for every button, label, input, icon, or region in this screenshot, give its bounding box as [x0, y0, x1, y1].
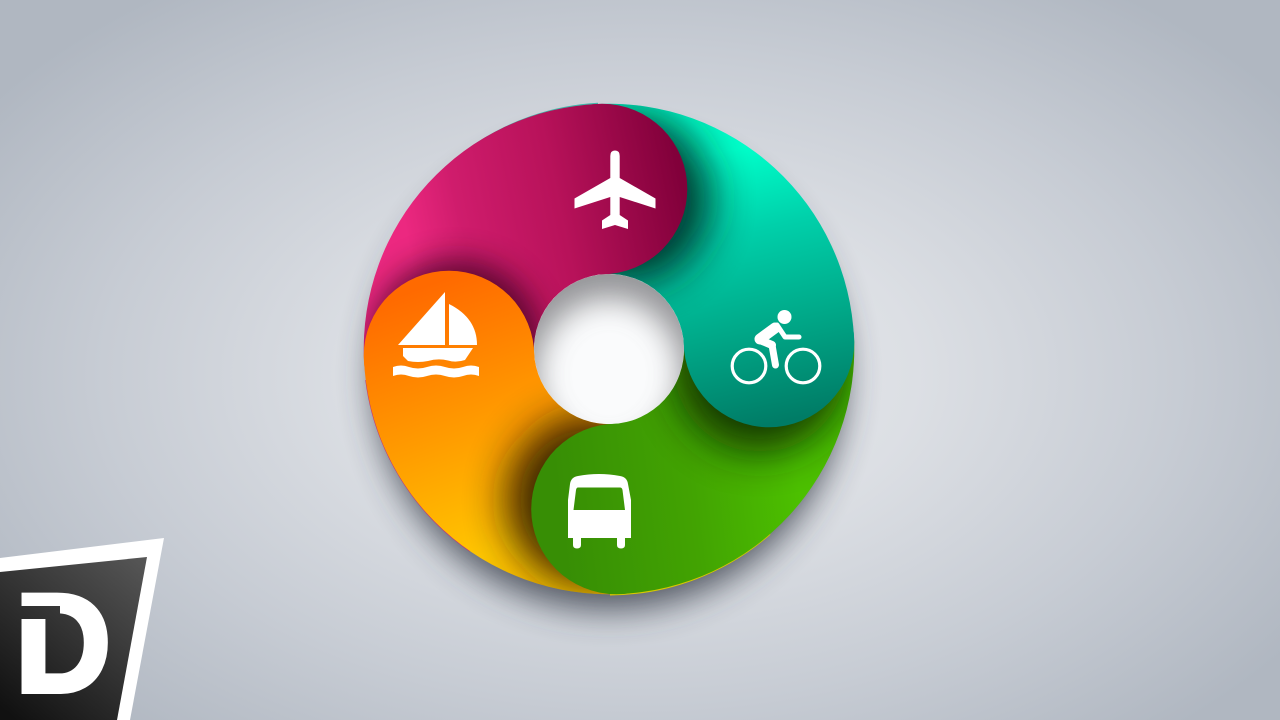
rim colour fringes: [366, 104, 770, 595]
petal head: teal: [684, 257, 854, 427]
shadow continuing over teal head: [540, 112, 712, 284]
petal head: green: [531, 424, 702, 594]
shadow cast on orange: [506, 414, 678, 586]
petal body: green: [612, 338, 854, 594]
donut drop shadow: [373, 138, 845, 610]
icon: cyclist: [732, 310, 820, 383]
petal body: orange: [364, 352, 620, 594]
petal body: teal: [598, 104, 854, 346]
icon: bus: [568, 474, 631, 548]
shadow continuing over magenta head: [370, 259, 542, 431]
petal body: magenta: [364, 104, 606, 360]
icon: sailboat: [393, 292, 479, 378]
shadow cast on magenta: [364, 237, 552, 354]
shadow cast on green: [674, 280, 846, 452]
logo letter: D: [15, 564, 111, 720]
infographic canvas: [0, 102, 871, 720]
donut chart: [364, 104, 854, 595]
shadow continuing over green head: [674, 280, 846, 452]
petal head: orange: [364, 271, 534, 441]
icon: airplane: [574, 150, 656, 229]
shadow cast on teal: [540, 112, 712, 284]
logo badge: [0, 538, 164, 720]
shadow continuing over orange head: [500, 408, 516, 424]
logo notch: [16, 606, 60, 619]
petal head: magenta: [517, 104, 687, 274]
hole: [534, 274, 684, 424]
